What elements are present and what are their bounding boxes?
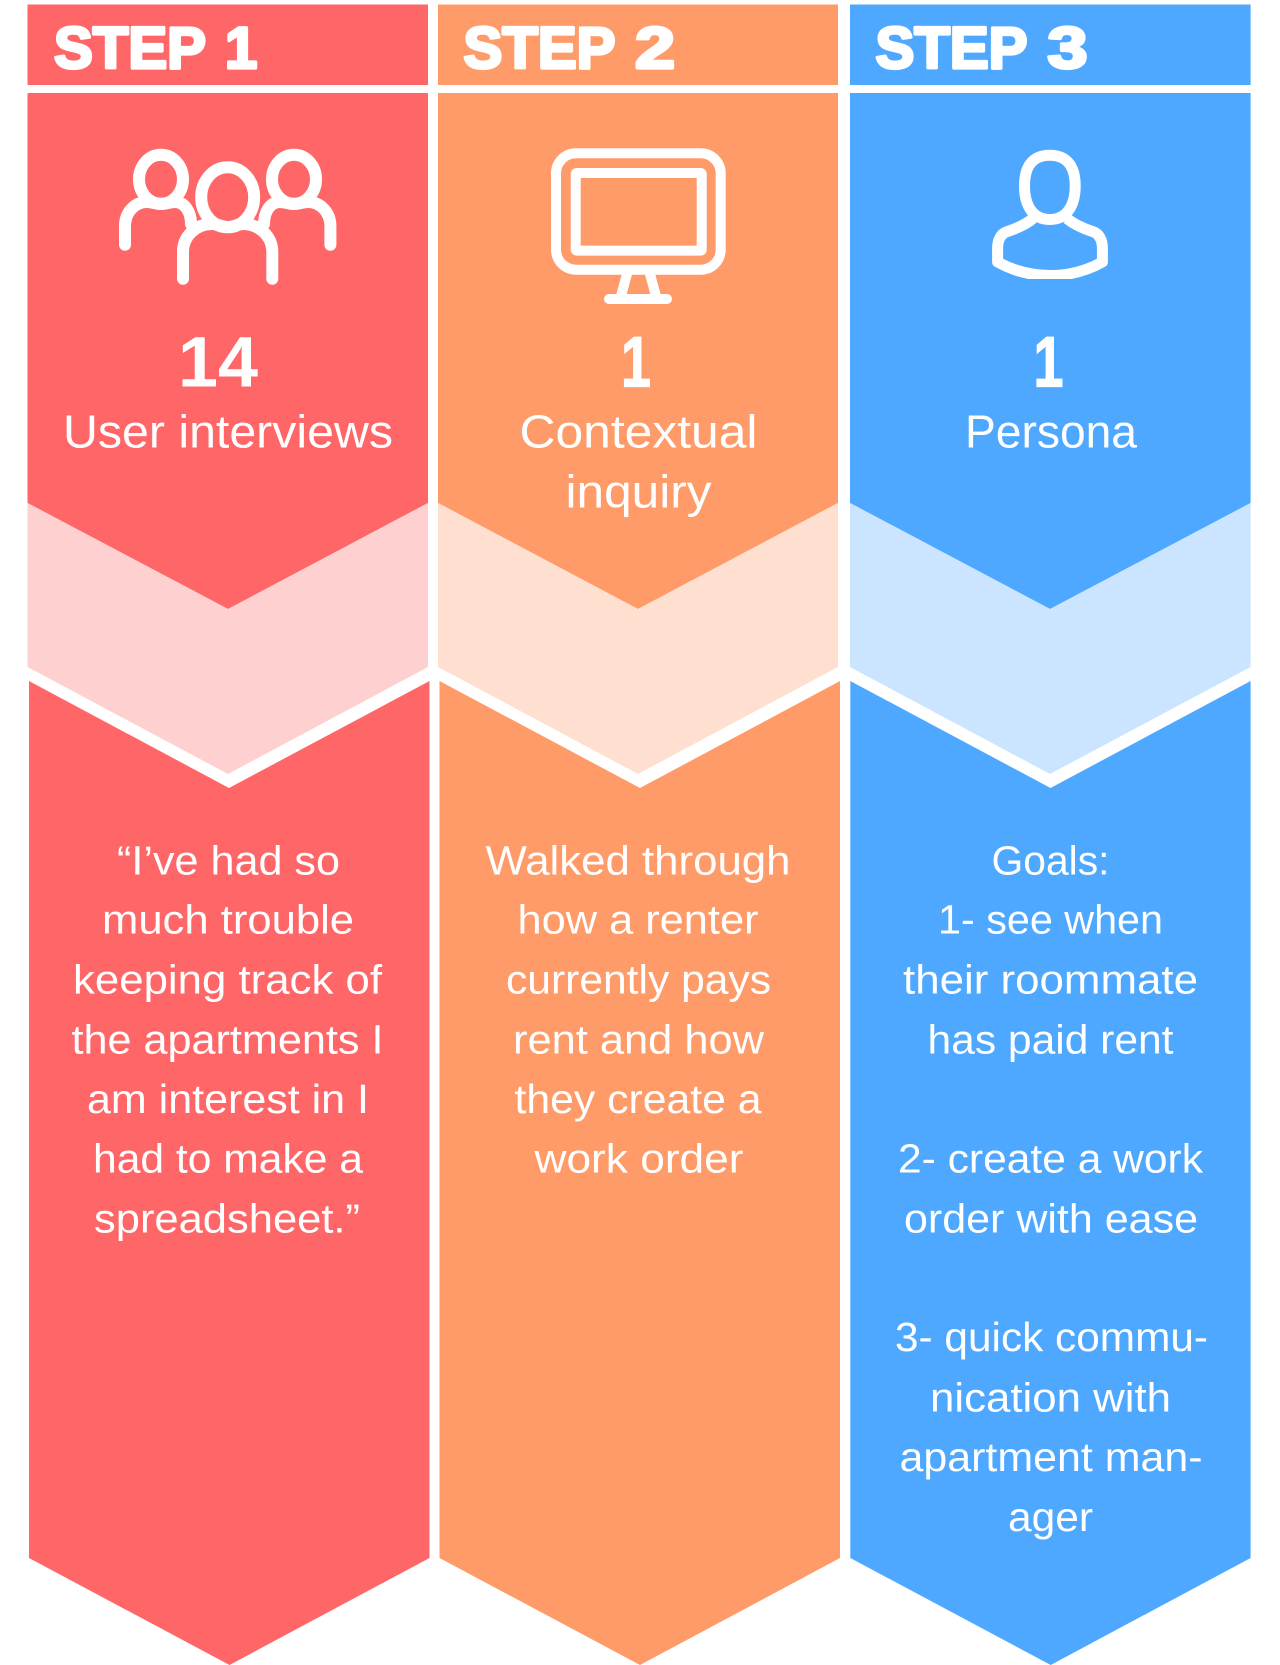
persona goals list: order with ease — [904, 1196, 1198, 1242]
icon: group of three people — [125, 155, 330, 279]
icon: single person — [998, 155, 1102, 276]
persona goals list: ager — [1008, 1494, 1093, 1540]
quote text: much trouble — [102, 897, 354, 943]
icon: desktop monitor — [556, 153, 721, 299]
step 3 header bar: 3 — [1048, 16, 1088, 81]
contextual inquiry description: how a renter — [518, 897, 758, 943]
step 1 header bar: 1 — [225, 16, 257, 81]
persona goals list: Goals: — [992, 837, 1110, 883]
quote text — [72, 837, 384, 1242]
step 1 lower chevron panel — [29, 681, 430, 1665]
step 2 header bar: STEP — [464, 16, 616, 81]
label: contextual inquiry — [520, 406, 758, 518]
quote text: keeping track of — [73, 957, 383, 1003]
step 1 header bar: STEP — [54, 16, 206, 81]
panel: step 1 column — [28, 4, 430, 1665]
persona goals list: apartment man- — [900, 1434, 1202, 1480]
step 3 pale chevron band — [850, 503, 1251, 774]
quote text: am interest in I — [87, 1076, 369, 1122]
contextual inquiry description — [486, 837, 790, 1182]
persona goals list — [895, 837, 1208, 1540]
step 2 pale chevron band — [438, 503, 838, 774]
step 3 lower chevron panel — [850, 681, 1251, 1665]
persona goals list: their roommate — [903, 957, 1198, 1003]
persona goals list: 2- create a work — [898, 1136, 1204, 1182]
panel: step 3 column — [850, 4, 1251, 1665]
step 1 header bar — [28, 4, 428, 85]
contextual inquiry description: work order — [533, 1136, 744, 1182]
label: user interviews: User interviews — [63, 406, 393, 458]
step 2 header bar — [438, 4, 838, 85]
contextual inquiry description: rent and how — [513, 1017, 764, 1063]
contextual inquiry description: currently pays — [506, 957, 771, 1003]
stat: 14: 14 — [178, 323, 259, 402]
step 3 top chevron panel — [850, 93, 1251, 609]
label: persona: Persona — [965, 406, 1137, 458]
quote text: the apartments I — [72, 1017, 384, 1063]
contextual inquiry description: Walked through — [486, 837, 790, 883]
step 1 pale chevron band — [28, 503, 428, 774]
quote text: “I’ve had so — [117, 837, 340, 883]
persona goals list: 3- quick commu- — [895, 1314, 1208, 1360]
step 2 header bar: 2 — [635, 16, 675, 81]
step 2 lower chevron panel — [440, 681, 840, 1665]
label: contextual inquiry: inquiry — [566, 466, 712, 518]
persona goals list: nication with — [930, 1375, 1171, 1421]
quote text: had to make a — [93, 1136, 363, 1182]
stat: 1: 1 — [621, 323, 651, 402]
step 2 top chevron panel — [438, 93, 838, 609]
persona goals list: 1- see when — [938, 897, 1163, 943]
contextual inquiry description: they create a — [514, 1076, 762, 1122]
stat: 1: 1 — [1034, 323, 1064, 402]
panel: step 2 column — [438, 4, 840, 1665]
quote text: spreadsheet.” — [94, 1196, 360, 1242]
step 3 header bar — [850, 4, 1251, 85]
step 1 top chevron panel — [28, 93, 428, 609]
persona goals list: has paid rent — [928, 1017, 1174, 1063]
step 3 header bar: STEP — [876, 16, 1028, 81]
label: contextual inquiry: Contextual — [520, 406, 758, 458]
